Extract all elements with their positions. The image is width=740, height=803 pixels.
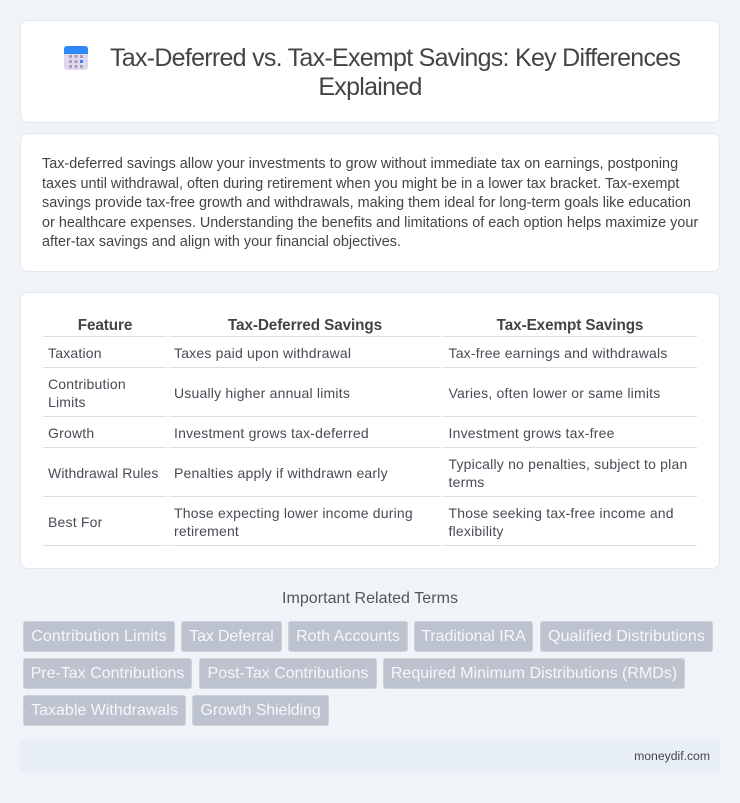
table: Tax-Exempt Savings	[497, 317, 643, 334]
pills: related terms: Post-Tax Contributions	[208, 665, 368, 682]
pills: related terms: Tax Deferral	[189, 628, 274, 645]
pills: related terms	[23, 621, 713, 726]
table: terms	[448, 474, 484, 490]
summary text: after-tax savings and align with your financial objectives.	[42, 234, 401, 250]
title: Tax-Deferred vs. Tax-Exempt Savings: Key Differences	[110, 44, 680, 72]
row: taxation: Taxation	[48, 345, 102, 361]
panel: comparison table	[20, 292, 720, 569]
table: Those seeking tax-free income and	[448, 505, 674, 521]
table: Investment grows tax-deferred	[174, 425, 369, 441]
footer bar	[20, 739, 720, 773]
table: Penalties apply if withdrawn early	[174, 465, 388, 481]
icon: calendar	[64, 46, 88, 70]
pills: related terms: Required Minimum Distributions (RMDs)	[391, 665, 677, 682]
row: withdrawal rules: Withdrawal Rules	[48, 465, 159, 481]
row: contribution limits	[48, 376, 126, 410]
table	[43, 317, 697, 546]
summary text	[42, 156, 698, 250]
pills: related terms: Taxable Withdrawals	[31, 702, 178, 719]
table: Taxes paid upon withdrawal	[174, 345, 351, 361]
title second line: Explained	[318, 73, 422, 101]
related terms heading: Important Related Terms	[282, 590, 458, 607]
pills: related terms: Growth Shielding	[200, 702, 321, 719]
table: Investment grows tax-free	[448, 425, 615, 441]
table: Those expecting lower income during	[174, 505, 413, 521]
table: Tax-free earnings and withdrawals	[448, 345, 668, 361]
table: Tax-Deferred Savings	[228, 317, 382, 334]
panel: summary	[20, 133, 720, 272]
panel: title header	[20, 20, 720, 123]
summary text: Tax-deferred savings allow your investments to grow without immediate tax on earnings, postponing	[42, 156, 678, 172]
row: contribution limits: Limits	[48, 394, 86, 410]
table: Varies, often lower or same limits	[448, 385, 660, 401]
summary text: or healthcare expenses. Understanding the benefits and limitations of each option helps maximize your	[42, 214, 698, 230]
row: best for: Best For	[48, 514, 103, 530]
summary text: taxes until withdrawal, often during retirement when you might be in a lower tax bracket. Tax-exempt	[42, 176, 679, 192]
table header: Feature	[78, 317, 132, 334]
table: flexibility	[448, 523, 504, 539]
pills: related terms: Roth Accounts	[296, 628, 400, 645]
summary text: savings provide tax-free growth and withdrawals, making them ideal for long-term goals like education	[42, 195, 691, 211]
row: contribution limits: Contribution	[48, 376, 126, 392]
pills: related terms: Traditional IRA	[421, 628, 526, 645]
pills: related terms: Contribution Limits	[31, 628, 167, 645]
table: retirement	[174, 523, 239, 539]
footer source: moneydif.com	[634, 749, 710, 763]
pills: related terms: Pre-Tax Contributions	[31, 665, 184, 682]
row: growth: Growth	[48, 425, 94, 441]
table: Usually higher annual limits	[174, 385, 350, 401]
pills: related terms: Qualified Distributions	[548, 628, 705, 645]
table: Typically no penalties, subject to plan	[448, 456, 687, 472]
